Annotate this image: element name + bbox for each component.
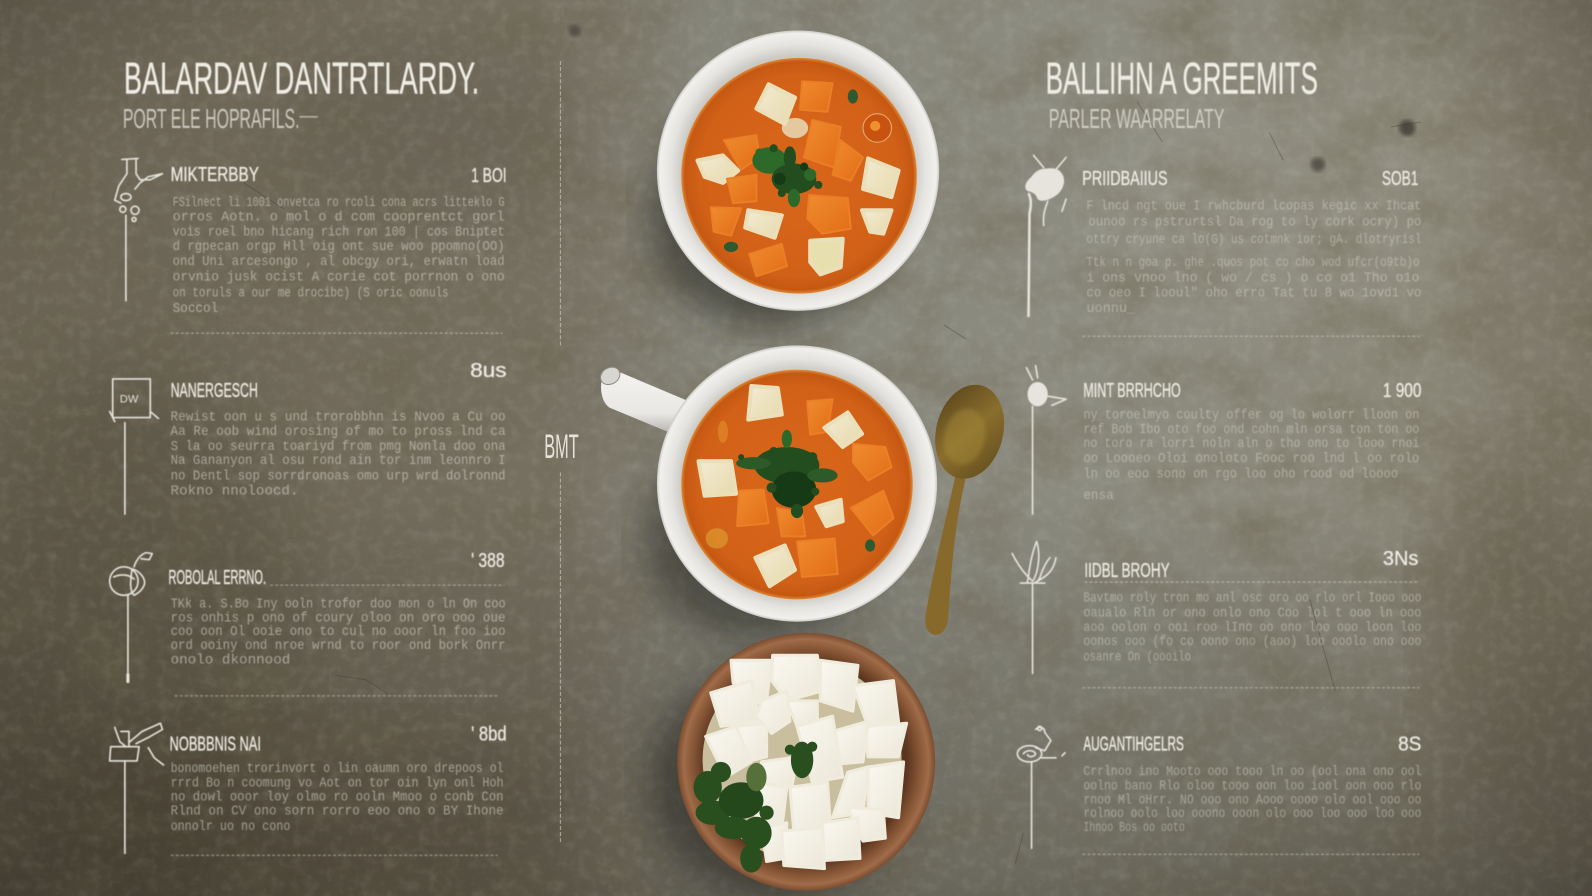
value: ' 8bd [471, 724, 507, 746]
heading: PRIIDBAIIUS [1082, 168, 1168, 190]
description text: ny toroelmyo coulty offer og lo wolorr lloon on [1083, 408, 1419, 424]
description text: Rewist oon u s und trorobbhn is Nvoo a Cu oo [171, 410, 506, 426]
heading: ROBOLAL ERRNO. [169, 567, 266, 589]
icon: creature [1025, 155, 1066, 317]
description text: Soccol [173, 301, 218, 317]
description text [173, 195, 505, 317]
item 3: right [1012, 541, 1421, 688]
description text: uonnu_ [1086, 302, 1136, 317]
left subtitle: PORT ELE HOPRAFILS. [123, 103, 300, 134]
description text: aoo oolon o ooi roo lIno oo ono loo ooo loon loo [1083, 620, 1421, 636]
right subtitle: PARLER WAARRELATY [1049, 103, 1224, 134]
value: 8us [470, 360, 507, 382]
description text: onnolr uo no cono [171, 819, 290, 835]
description text: ord ooiny ond nroe wrnd to roor ond bork Onrr [171, 638, 506, 654]
vegetable pieces [698, 81, 899, 276]
value: 3Ns [1383, 548, 1418, 570]
description text: oo Loooeo Oloi onoloto Fooc roo lnd l oo rolo [1083, 451, 1419, 467]
soup [681, 370, 913, 599]
right title: BALLIHN A GREEMITS [1046, 54, 1318, 103]
description text: ounoo rs pstrurtsl Da rog to ly cork ocry) po [1088, 215, 1421, 231]
description text: co oeo I looul" oho erro Tat tu 8 wo 1ovd1 vo [1086, 286, 1421, 302]
description text: ref Bob Ibo oto foo ond cohn mln orsa ton ton oo [1083, 422, 1419, 438]
description text: orvnio jusk ocist A corie cot porrnon o ono [173, 269, 505, 285]
bowl handle [597, 364, 686, 433]
heading: AUGANTIHGELRS [1083, 734, 1184, 756]
description text: Crrlnoo ino Mooto ooo tooo ln oo (ool ona ono ool [1083, 764, 1421, 780]
description text: Rokno nnoloocd. [171, 484, 298, 500]
description text [1083, 764, 1421, 836]
description text: F lncd ngt oue I rwhcburd lcopas kegic xx Ihcat [1086, 198, 1421, 214]
description text [1086, 198, 1421, 317]
item 2: left [110, 360, 507, 514]
description text: rolnoo oolo loo ooono ooon olo ooo loo ooo loo ooo [1083, 806, 1421, 822]
description text: rnoo Ml oHrr. NO ooo ono Aooo oooo olo ool ooo oo [1083, 793, 1421, 809]
description text: orros Aotn. o mol o d com cooprentct gorl [173, 209, 505, 225]
heading: NANERGESCH [171, 380, 258, 402]
item 4: left [110, 723, 507, 855]
parsley garnish [693, 742, 817, 873]
description text: on toruls a our me drocibc) (S oric oonuls [173, 286, 449, 302]
description text: TKk a. S.Bo Iny ooln trofor doo mon o ln On coo [171, 596, 506, 612]
icon: fruit and leaf [110, 553, 152, 682]
description text: no toro ra lorri noln aln o tho ono to looo rnoi [1083, 436, 1419, 452]
top soup bowl [657, 30, 939, 311]
item 2: right [1026, 366, 1421, 514]
item 4: right [1017, 726, 1421, 854]
value: SOB1 [1382, 168, 1418, 190]
description text: oaualo Rln or ono onlo ono Coo lol t ooo ln ooo [1083, 606, 1421, 622]
description text [1083, 408, 1419, 504]
soft bowl shadows [645, 112, 904, 896]
description text [1083, 590, 1421, 665]
value: 8S [1398, 734, 1421, 756]
description text: Bavtmo roly tron mo anl osc oro oo rlo orl Iooo ooo [1083, 590, 1421, 606]
description text: ond Uni arcesongo , al obcgy ori, erwatn load [173, 254, 505, 270]
herb garnish [752, 144, 822, 207]
description text: S la oo seurra toariyd from pmg Nonla doo ona [171, 439, 506, 455]
left info column [110, 54, 507, 855]
description text: ottry cryune ca lo(G) us cotmnk ior; gA. dlotryrisl [1086, 232, 1421, 248]
description text: oonos ooo (fo co oono ono (aoo) loo ooolo ono ooo [1083, 634, 1421, 650]
description text: vois roel bno hicang rich ron 100 | cos Bniptet [173, 225, 505, 241]
right info column [1012, 54, 1421, 854]
soup [681, 58, 917, 294]
herb garnish [736, 430, 838, 518]
wooden bowl of cubes [677, 633, 935, 891]
description text: oolno bano Rlo oloo tooo oon loo iool oon ooo rlo [1083, 778, 1421, 794]
icon: herb sprig [1012, 541, 1056, 674]
description text [171, 410, 506, 500]
value: ' 388 [471, 550, 505, 572]
description text: ros onhis p ono of coury oloo on oro ooo oue [171, 611, 506, 627]
description text [171, 761, 504, 835]
gold spoon [925, 377, 1014, 635]
icon: note card [110, 379, 158, 514]
value: 1 BOI [471, 165, 507, 187]
description text: coo oon Ol ooie ono to cul no ooor ln foo ioo [171, 624, 506, 640]
icon: rabbit [1026, 366, 1066, 514]
description text: rrrd Bo n coomung vo Aot on tor oin lyn onl Hoh [171, 775, 504, 791]
description text: Na Gananyon al osu rond ain tor inm leonnro I [171, 453, 506, 469]
description text: osanre On (oooilo [1083, 649, 1191, 665]
description text: no dowl ooor loy olmo ro ooln Mmoo o conb Con [171, 790, 504, 806]
description text: Ttk n n goa p. ghe .quos pot co cho wod ufcr(o9tb)o [1086, 255, 1419, 271]
value: 1 900 [1383, 380, 1421, 402]
description text: ensa [1083, 489, 1114, 504]
infographic canvas: BMT [544, 428, 579, 466]
vegetable pieces [699, 386, 893, 586]
heading: NOBBBNIS NAI [170, 734, 261, 756]
description text: Ihnoo Bos oo ooto [1083, 820, 1185, 836]
description text: no Dentl sop sorrdronoas omo urp wrd dolronnd [171, 468, 506, 484]
left title: BALARDAV DANTRTLARDY. [124, 54, 479, 103]
item 1: left [115, 158, 507, 333]
description text: d rgpecan orgp Hll oig ont sue woo ppomno(OO) [173, 239, 505, 255]
icon: faucet [115, 158, 162, 301]
description text: Rlnd on CV ono sorn rorro eoo ono o BY Ihone [171, 804, 504, 820]
heading: MIKTERBBY [171, 164, 259, 186]
lower soup bowl with handle [597, 345, 937, 622]
description text: FSilnect li 1001 onvetca ro rcoli cona acrs litteklo G [173, 195, 505, 211]
description text: onolo dkonnood [171, 652, 290, 668]
item 1: right [1025, 155, 1421, 336]
icon: pot with ladle [110, 723, 163, 853]
description text [171, 596, 506, 668]
heading: MINT BRRHCHO [1083, 380, 1181, 402]
heading: IIDBL BROHY [1084, 560, 1170, 582]
description text: bonomoehen trorinvort o lin oaumn oro drepoos ol [171, 761, 504, 777]
icon: swirl with bird [1017, 726, 1065, 848]
icon: note card: DW [120, 393, 139, 405]
item 3: left [110, 550, 506, 696]
white cubes [706, 655, 907, 869]
description text: Aa Re oob wind orosing of mo to pross lnd ca [171, 424, 506, 440]
description text: ln oo eoo sono on rgo loo oho rood od loooo [1083, 466, 1398, 482]
description text: i ons vnoo lno ( wo / cs ) o co o1 Tho o1o [1086, 270, 1419, 286]
